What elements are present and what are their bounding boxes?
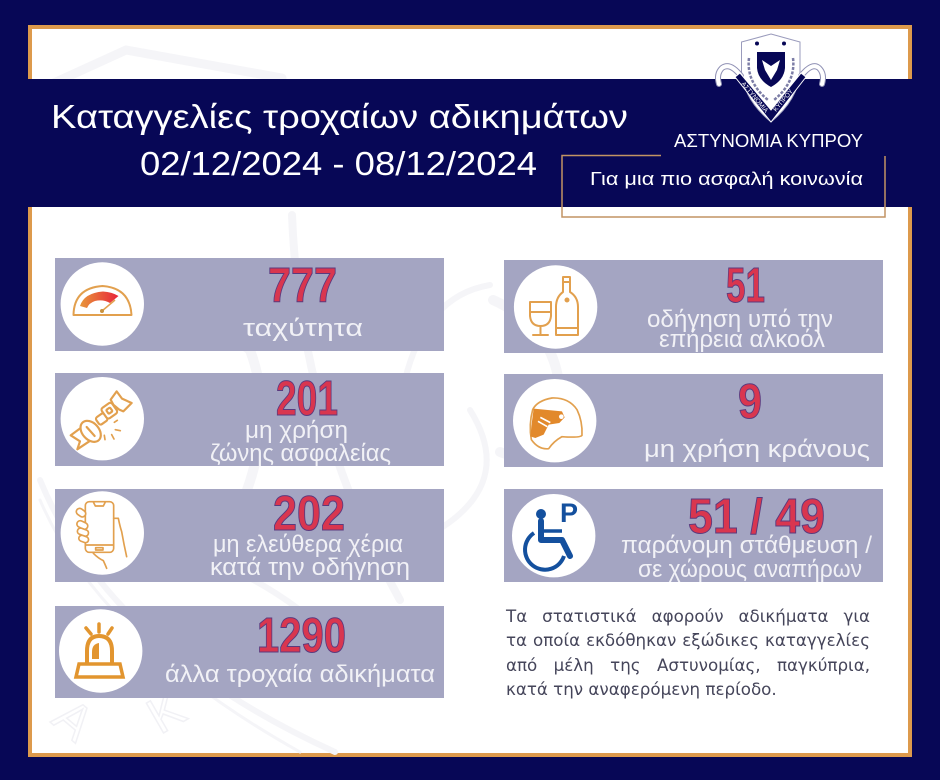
panel: other offences — [55, 606, 444, 698]
panel: other offences: 1290 — [257, 609, 346, 663]
title: Καταγγελίες τροχαίων αδικημάτων — [51, 98, 628, 135]
icon: police crest: ΑΣΤΥΝΟΜΙΑ — [739, 81, 770, 115]
panel: illegal parking: σε χώρους αναπήρων — [638, 556, 862, 583]
panel: alcohol: επήρεια αλκοόλ — [659, 326, 825, 353]
icon: motorcycle helmet — [530, 398, 582, 449]
icon: police crest: ΚΥΠΡΟΥ — [772, 88, 795, 113]
text block: statistics note: κατά την αναφερόμενη περίοδο. — [506, 679, 777, 699]
text block: statistics note: τα οποία εκδόθηκαν εξώδικες καταγγελίες — [506, 630, 870, 650]
panel: helmet — [504, 374, 883, 467]
panel: speeding — [55, 258, 444, 351]
panel: seat belt: ζώνης ασφαλείας — [210, 440, 391, 467]
watermark: faint police crest — [34, 50, 560, 752]
motto box — [562, 156, 885, 217]
panel: alcohol: οδήγηση υπό την — [647, 306, 833, 333]
panel: seat belt: μη χρήση — [245, 417, 348, 444]
text: police name: ΑΣΤΥΝΟΜΙΑ ΚΥΠΡΟΥ — [674, 131, 863, 151]
text block: statistics note — [506, 606, 870, 699]
panel: other offences: άλλα τροχαία αδικήματα — [165, 661, 435, 688]
icon: police crest — [718, 34, 823, 122]
panel: seat belt — [55, 372, 444, 467]
panel: hands-free: μη ελεύθερα χέρια — [213, 531, 403, 558]
icon: disabled parking: P — [560, 498, 578, 528]
panel: hands-free: 202 — [273, 487, 345, 541]
panel: illegal parking: παράνομη στάθμευση / — [621, 532, 872, 559]
panel: alcohol: 51 — [726, 259, 765, 313]
panel: seat belt: 201 — [276, 372, 338, 426]
watermark: faint police crest: Α — [43, 688, 105, 752]
panel: helmet: 9 — [738, 375, 762, 429]
panel: illegal parking: 51 / 49 — [688, 490, 825, 544]
panel: illegal parking — [504, 489, 883, 583]
panel: hands-free — [55, 487, 444, 582]
icon: glass and bottle — [530, 277, 578, 335]
motto box: Για μια πιο ασφαλή κοινωνία — [590, 169, 863, 189]
panel: hands-free: κατά την οδήγηση — [210, 554, 410, 581]
icon: siren light — [76, 624, 123, 677]
panel: helmet: μη χρήση κράνους — [644, 436, 870, 463]
header band — [0, 79, 940, 207]
icon: disabled parking — [525, 498, 578, 570]
icon: speedometer — [74, 286, 132, 315]
panel: alcohol — [504, 259, 883, 353]
watermark: faint police crest: Κ — [138, 679, 194, 745]
panel: speeding: ταχύτητα — [243, 315, 363, 342]
panel: speeding: 777 — [268, 259, 337, 313]
icon: hand holding phone — [75, 502, 127, 568]
icon: seat belt buckle — [71, 391, 132, 449]
title: 02/12/2024 - 08/12/2024 — [140, 145, 537, 182]
title — [51, 98, 628, 182]
text block: statistics note: από μέλη της Αστυνομίας, παγκύπρια, — [506, 655, 870, 675]
text block: statistics note: Τα στατιστικά αφορούν αδικήματα για — [506, 606, 870, 626]
